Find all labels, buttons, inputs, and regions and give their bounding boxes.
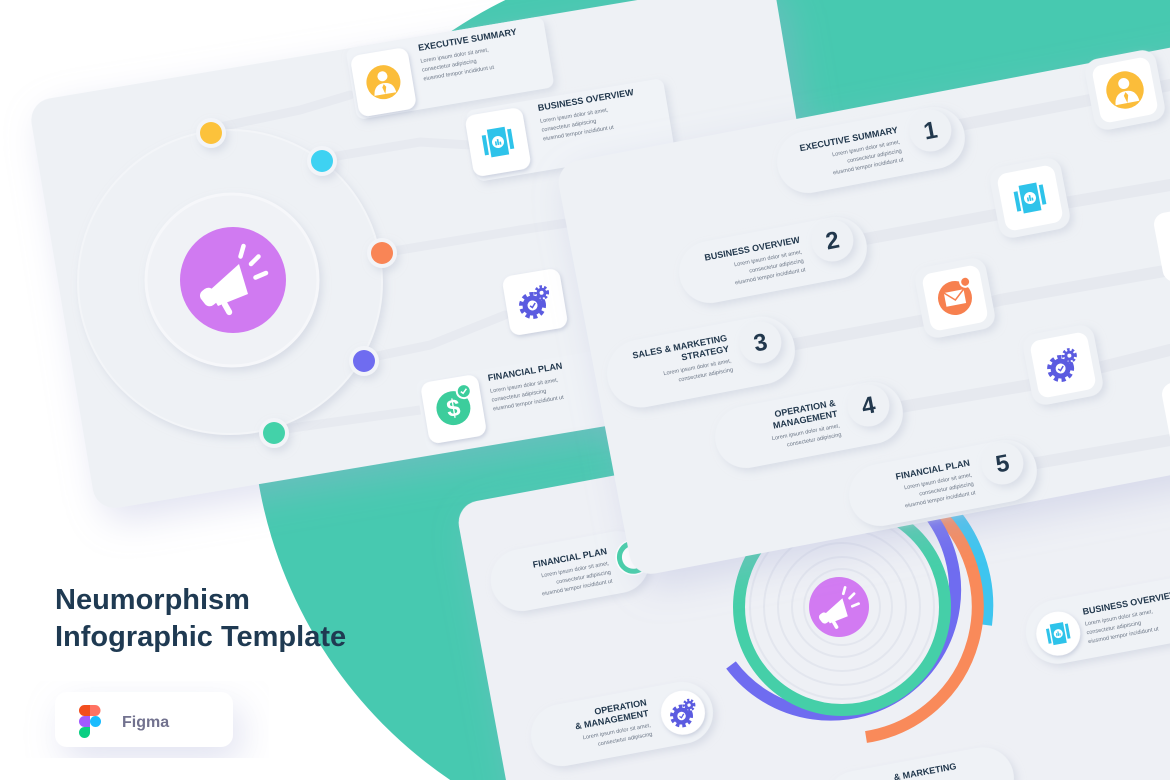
- connector grooves: [215, 95, 620, 430]
- icon box: gear: [1031, 330, 1107, 408]
- pill: operation & management: consectetur adipiscing: [597, 732, 653, 748]
- pill 3: STRATEGY: [681, 344, 730, 362]
- pill: business overview: [1036, 592, 1170, 668]
- pill 1: consectetur adipiscing: [847, 148, 902, 165]
- pill 4: 4: [859, 391, 878, 421]
- panel 1: circular infographic: [28, 0, 841, 511]
- pill: business overview: eiusmod tempor incididunt ut: [1088, 626, 1160, 645]
- pill 5: eiusmod tempor incididunt ut: [905, 490, 976, 509]
- card: executive summary: Lorem ipsum dolor sit amet,: [420, 47, 490, 65]
- card: financial plan: $: [445, 394, 463, 423]
- pill 1: [788, 114, 970, 197]
- pill 2: eiusmod tempor incididunt ut: [735, 267, 806, 286]
- pill 4: consectetur adipiscing: [787, 432, 842, 448]
- pill: financial plan: [502, 541, 652, 616]
- radial arcs: [731, 490, 987, 737]
- card: business overview: [463, 78, 675, 182]
- icon: figma logo: [79, 705, 101, 738]
- pill 3: 3: [751, 329, 770, 358]
- connector grooves: [790, 85, 1170, 465]
- card: business overview: BUSINESS OVERVIEW: [537, 87, 635, 113]
- card: financial plan: Lorem ipsum dolor sit amet,: [490, 377, 559, 395]
- figma badge: [55, 692, 233, 747]
- pill 2: BUSINESS OVERVIEW: [704, 235, 801, 263]
- pill 4: MANAGEMENT: [772, 408, 839, 431]
- pill: operation & management: & MANAGEMENT: [574, 708, 650, 731]
- dots: [196, 118, 397, 448]
- pill 5: 5: [993, 450, 1012, 479]
- pill 2: consectetur adipiscing: [749, 258, 804, 275]
- card: financial plan: FINANCIAL PLAN: [487, 361, 563, 383]
- pill 3: SALES & MARKETING: [632, 333, 728, 361]
- icon box: mail: [923, 264, 999, 342]
- pill: operation & management: OPERATION: [594, 697, 647, 717]
- inner ring: [157, 224, 324, 372]
- center icon: megaphone: [180, 227, 286, 333]
- teal top right block: [902, 0, 1170, 78]
- pill 4: Lorem ipsum dolor sit amet,: [771, 423, 841, 442]
- pill: operation & management: Lorem ipsum dolor sit amet,: [582, 723, 652, 741]
- pill: operation & management: [542, 690, 718, 770]
- pill 1: Lorem ipsum dolor sit amet,: [832, 139, 901, 158]
- pill 4: [726, 389, 908, 472]
- icon boxes: partial right edge: [1154, 212, 1170, 436]
- pill 2: 2: [823, 227, 842, 256]
- title: Neumorphism: [55, 584, 250, 616]
- pill 3: [618, 326, 800, 412]
- pill: business overview: consectetur adipiscing: [1086, 620, 1142, 636]
- title: [55, 584, 346, 653]
- pill 5: consectetur adipiscing: [919, 481, 974, 498]
- pill: sales & marketing (partial): [894, 757, 1018, 780]
- title: Infographic Template: [55, 621, 346, 653]
- pill: financial plan: Lorem ipsum dolor sit amet,: [541, 561, 610, 579]
- center megaphone: [809, 577, 869, 637]
- pill 5: Lorem ipsum dolor sit amet,: [904, 472, 973, 491]
- pill 2: Lorem ipsum dolor sit amet,: [734, 249, 803, 268]
- panel 2: numbered list: [555, 15, 1170, 578]
- card: business overview: consectetur adipiscing: [541, 119, 597, 134]
- pill 5: FINANCIAL PLAN: [895, 458, 971, 482]
- pill: financial plan: consectetur adipiscing: [556, 570, 611, 586]
- concentric rings: [750, 515, 934, 699]
- icon box: person: [1083, 48, 1167, 132]
- card: executive summary: eiusmod tempor incididunt ut: [423, 65, 495, 82]
- icon box: business: [998, 164, 1074, 242]
- teal background circle: [258, 0, 638, 780]
- panel 3: radial chart: [458, 476, 1170, 780]
- pill: financial plan: FINANCIAL PLAN: [532, 546, 608, 570]
- card: executive summary: EXECUTIVE SUMMARY: [417, 27, 517, 53]
- card: financial plan: consectetur adipiscing: [491, 389, 547, 404]
- pill 1: EXECUTIVE SUMMARY: [799, 125, 899, 153]
- pill: financial plan: eiusmod tempor incididunt ut: [542, 578, 614, 597]
- card: financial plan: [422, 362, 564, 446]
- outer orbit circle: [78, 130, 382, 434]
- pill 1: eiusmod tempor incididunt ut: [833, 157, 904, 176]
- pill 3: Lorem ipsum dolor sit amet,: [663, 358, 732, 377]
- card: executive summary: [345, 16, 555, 120]
- card: business overview: eiusmod tempor incididunt ut: [543, 125, 615, 143]
- card: business overview: Lorem ipsum dolor sit amet,: [540, 107, 609, 125]
- figma badge: Figma: [122, 714, 169, 731]
- pill 1: 1: [921, 117, 940, 146]
- pill 5: [860, 448, 1042, 530]
- pill 2: [690, 224, 872, 307]
- icon box: gear: [501, 268, 569, 336]
- card: financial plan: eiusmod tempor incididunt ut: [493, 395, 565, 413]
- pill 4: OPERATION &: [774, 398, 837, 419]
- pill: business overview: Lorem ipsum dolor sit amet,: [1085, 609, 1154, 628]
- pill 3: consectetur adipiscing: [678, 367, 734, 383]
- card: executive summary: consectetur adipiscing: [422, 59, 477, 74]
